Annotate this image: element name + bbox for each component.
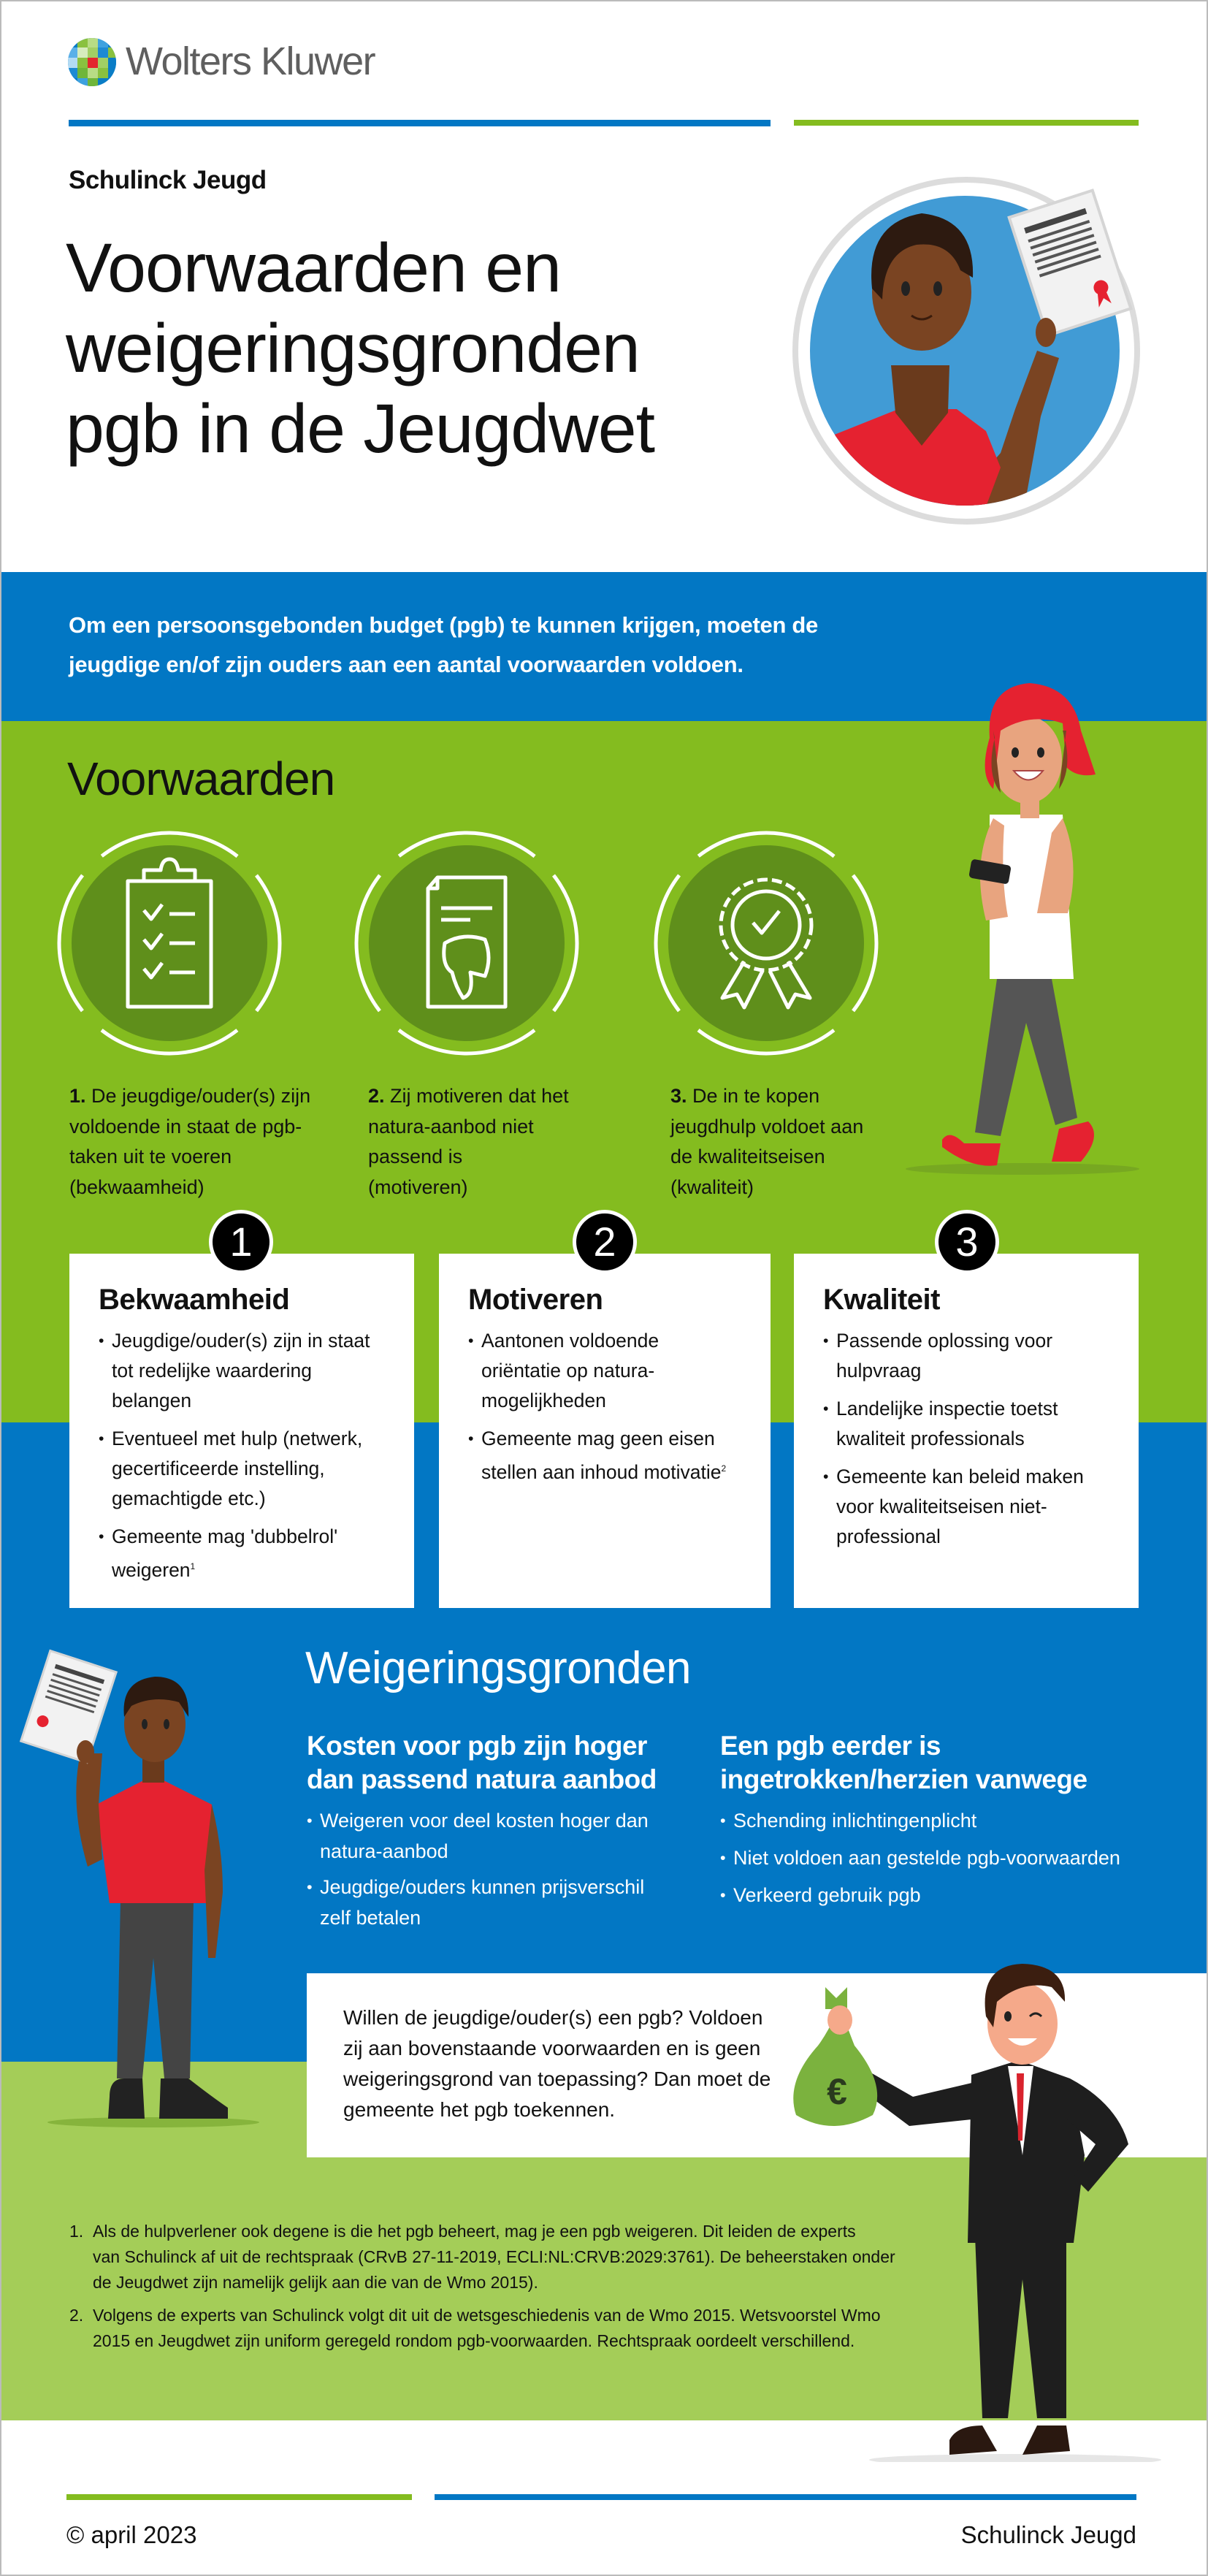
bullet list [720,1810,1120,1906]
bullet list: professional [836,1525,941,1547]
footnotes: 2. [69,2306,83,2325]
number badge 1 [209,1210,273,1274]
callout text: Willen de jeugdige/ouder(s) een pgb? Voldoen [343,2006,762,2029]
bullet list: Gemeente mag geen eisen [481,1428,715,1449]
intro band (blue) [0,572,1208,721]
bullet list: Verkeerd gebruik pgb [733,1884,921,1906]
subheading [307,1731,657,1794]
heading: Kwaliteit: Kwaliteit [823,1284,940,1316]
bullet list: Jeugdige/ouder(s) zijn in staat [112,1330,370,1352]
callout box [307,1973,1208,2157]
title: Voorwaarden en [66,229,561,307]
text: condition 2: natura-aanbod niet [368,1115,534,1137]
bullet list: Eventueel met hulp (netwerk, [112,1428,362,1449]
panel: Kwaliteit [794,1254,1139,1608]
text: condition 3: de kwaliteitseisen [670,1146,825,1167]
subheading: ingetrokken/herzien vanwege [720,1764,1087,1794]
number badge 3 [935,1210,999,1274]
callout text: weigeringsgrond van toepassing? Dan moet de [343,2068,771,2090]
bullet list: Gemeente mag 'dubbelrol' [112,1525,337,1547]
text: condition 2: passend is [368,1146,462,1167]
text: condition 3: (kwaliteit) [670,1176,754,1198]
lower blue band [0,1422,1208,2062]
number badge 1: 1 [229,1219,253,1265]
footnotes: 2015 en Jeugdwet zijn uniform geregeld rondom pgb-voorwaarden. Rechtspraak oordeelt verschillend. [93,2331,855,2350]
bullet list: gecertificeerde instelling, [112,1457,325,1479]
title: pgb in de Jeugdwet [66,390,654,468]
illustration: girl with phone walking [906,683,1139,1175]
footnotes: Als de hulpverlener ook degene is die het pgb beheert, mag je een pgb weigeren. Dit leiden de experts [93,2222,856,2241]
bullet list: natura-aanbod [320,1840,448,1862]
footnotes: Volgens de experts van Schulinck volgt dit uit de wetsgeschiedenis van de Wmo 2015. Wetsvoorstel Wmo [93,2306,881,2325]
heading: Motiveren: Motiveren [468,1284,603,1316]
bullet list [469,1330,726,1483]
bullet list: hulpvraag [836,1360,921,1382]
title [66,229,654,468]
bullet list: Weigeren voor deel kosten hoger dan [320,1810,649,1832]
logo: Wolters Kluwer: Wolters Kluwer [126,39,375,83]
bullet list: Passende oplossing voor [836,1330,1052,1352]
bullet list: belangen [112,1390,191,1411]
text: condition 2: 2. Zij motiveren dat het [368,1085,569,1107]
footer: brand: Schulinck Jeugd [961,2521,1136,2548]
bullet list: mogelijkheden [481,1390,606,1411]
bullet list: tot redelijke waardering [112,1360,312,1382]
footer lines [66,2494,412,2500]
lower light green band [0,2062,1208,2420]
callout text: zij aan bovenstaande voorwaarden en is geen [343,2037,760,2059]
text: condition 1: voldoende in staat de pgb- [69,1115,302,1137]
heading: Bekwaamheid: Bekwaamheid [99,1284,289,1316]
bullet list: gemachtigde etc.) [112,1487,266,1509]
text: condition 3: jeugdhulp voldoet aan [670,1115,863,1137]
bullet list [307,1810,649,1929]
bullet list [824,1330,1084,1547]
title: weigeringsgronden [66,310,640,387]
icon: clipboard checklist [57,831,282,1055]
header lines [69,120,771,126]
footnotes [69,2222,895,2350]
bullet list: Landelijke inspectie toetst [836,1398,1058,1420]
bullet list: weigeren1 [112,1559,195,1581]
icon: award rosette [654,831,878,1055]
subheading: Kosten voor pgb zijn hoger [307,1731,647,1761]
number badge 2: 2 [593,1219,616,1265]
footnotes: de Jeugdwet zijn namelijk gelijk aan die van de Wmo 2015). [93,2273,538,2292]
bullet list: Jeugdige/ouders kunnen prijsverschil [320,1876,644,1898]
text: condition 2: (motiveren) [368,1176,468,1198]
bullet list: stellen aan inhoud motivatie2 [481,1461,726,1483]
subheading: Een pgb eerder is [720,1731,941,1761]
subheading [720,1731,1087,1794]
panel: ingetrokken [720,1731,1120,1906]
bullet list: Niet voldoen aan gestelde pgb-voorwaarden [733,1847,1120,1869]
bullet list: Gemeente kan beleid maken [836,1466,1084,1487]
panel: voorwaarden (green band) [0,721,1208,1422]
callout text: gemeente het pgb toekennen. [343,2098,615,2121]
text: condition 3 [670,1085,863,1198]
text: condition 2 [368,1085,569,1198]
intro text [69,612,818,677]
subtitle: Schulinck Jeugd: Schulinck Jeugd [69,166,267,194]
number badge 2 [573,1210,637,1274]
bullet list: voor kwaliteitseisen niet- [836,1495,1047,1517]
number badge 3: 3 [955,1219,979,1265]
panel: Bekwaamheid [69,1254,414,1608]
intro text: Om een persoonsgebonden budget (pgb) te kunnen krijgen, moeten de [69,612,818,638]
text: condition 1: taken uit te voeren [69,1146,232,1167]
text: condition 1 [69,1085,310,1198]
bullet list: Aantonen voldoende [481,1330,659,1352]
footnotes: van Schulinck af uit de rechtspraak (CRvB 27-11-2019, ECLI:NL:CRVB:2029:3761). De beheerstaken onder [93,2247,895,2266]
heading: Weigeringsgronden: Weigeringsgronden [305,1643,691,1693]
bullet list: zelf betalen [320,1907,421,1929]
footnotes: 1. [69,2222,83,2241]
illustration: man with certificate in circle [792,177,1140,525]
subheading: dan passend natura aanbod [307,1764,657,1794]
bullet list [99,1330,370,1581]
text: condition 3: 3. De in te kopen [670,1085,819,1107]
bullet list: oriëntatie op natura- [481,1360,654,1382]
illustration: businessman with money bag [793,1964,1161,2462]
illustration: man holding certificate [19,1650,259,2127]
illustration: businessman with money bag: € [827,2071,847,2112]
panel: Motiveren [439,1254,771,1608]
text: condition 1: (bekwaamheid) [69,1176,204,1198]
text: condition 1: 1. De jeugdige/ouder(s) zijn [69,1085,310,1107]
panel: kosten hoger [307,1731,657,1929]
bullet list: kwaliteit professionals [836,1428,1025,1449]
bullet list: Schending inlichtingenplicht [733,1810,976,1832]
callout text [343,2006,771,2121]
icon: document thumbs down [355,831,578,1055]
footer: date: © april 2023 [66,2521,196,2548]
heading: Voorwaarden: Voorwaarden [67,752,335,805]
intro text: jeugdige en/of zijn ouders aan een aantal voorwaarden voldoen. [69,652,743,677]
